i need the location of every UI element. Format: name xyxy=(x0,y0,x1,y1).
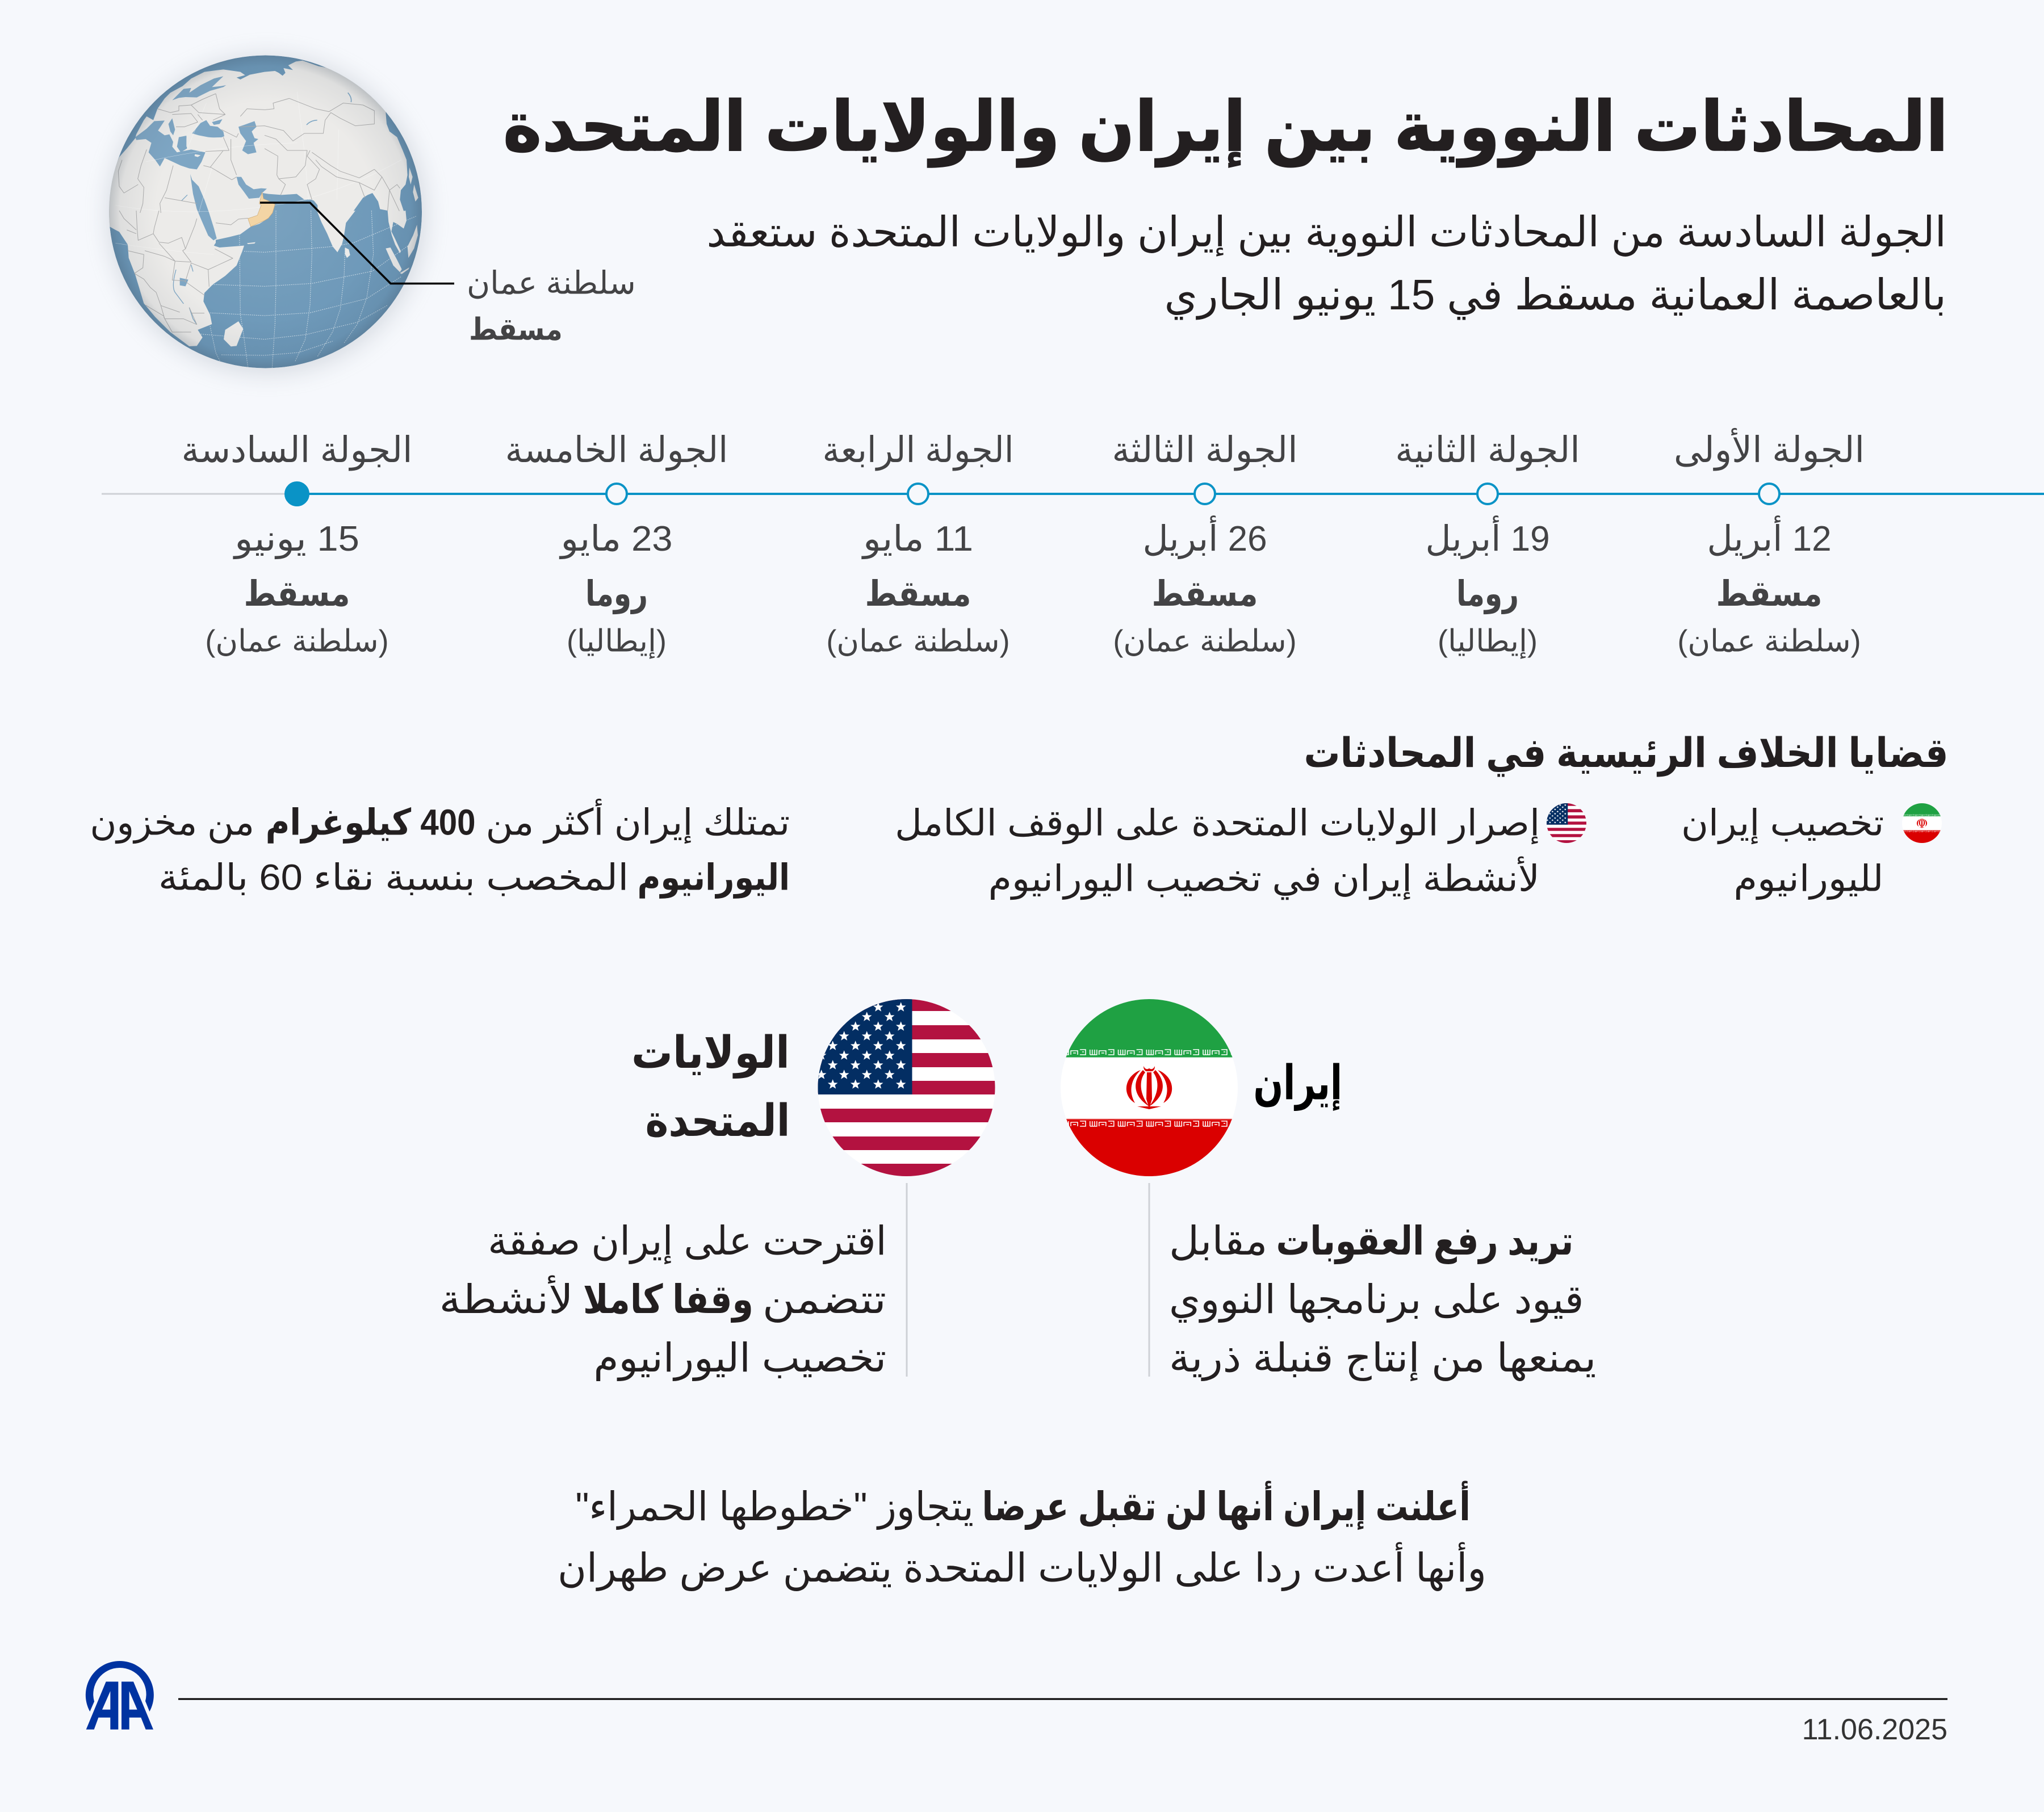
issue: uranium stockpile xyxy=(90,798,790,899)
round 4 xyxy=(822,430,1014,658)
round 5 xyxy=(505,430,728,659)
round 4: (سلطنة عمان) xyxy=(826,624,1010,658)
round 5: (إيطاليا) xyxy=(567,624,667,658)
round 3 xyxy=(1112,430,1298,658)
round 6: 15 يونيو xyxy=(234,519,359,559)
round 1: 12 أبريل xyxy=(1707,519,1832,559)
text: Iran position: قيود على برنامجها النووي xyxy=(1169,1277,1584,1322)
divider: Iran position xyxy=(1148,1183,1150,1377)
round 1 xyxy=(1674,428,1865,658)
issue: US position: إصرار الولايات المتحدة على الوقف الكامل xyxy=(895,803,1540,844)
round 6: مسقط xyxy=(244,574,350,614)
issue: US position: لأنشطة إيران في تخصيب اليورانيوم xyxy=(989,858,1540,899)
subtitle xyxy=(706,208,1946,320)
text: US position xyxy=(439,1219,886,1381)
round 4: مسقط xyxy=(865,574,971,614)
closing statement: يتجاوز "خطوطها الحمراء" xyxy=(576,1484,974,1529)
issue: uranium stockpile: 400 كيلوغرام xyxy=(266,802,476,843)
round 5: روما xyxy=(585,574,648,614)
icon: small US flag xyxy=(1546,803,1586,843)
section heading: قضايا الخلاف الرئيسية في المحادثات xyxy=(1304,731,1949,776)
timeline axis xyxy=(102,493,2044,495)
round 2 xyxy=(1395,430,1580,659)
round 3: (سلطنة عمان) xyxy=(1113,624,1297,658)
round 3: الجولة الثالثة xyxy=(1112,430,1298,470)
globe map xyxy=(104,56,425,372)
label: United States xyxy=(631,1027,790,1146)
round 1: مسقط xyxy=(1716,574,1823,614)
footer rule xyxy=(178,1698,1947,1700)
map label: Oman: مسقط xyxy=(469,313,563,347)
text: US position: تتضمن xyxy=(763,1277,886,1322)
text: US position: لأنشطة xyxy=(439,1277,573,1322)
map label: Oman: سلطنة عمان xyxy=(467,265,636,300)
subtitle: بالعاصمة العمانية مسقط في 15 يونيو الجاري xyxy=(1165,271,1946,318)
issue: Iran position: لليورانيوم xyxy=(1734,858,1884,899)
closing statement: وأنها أعدت ردا على الولايات المتحدة يتضمن عرض طهران xyxy=(558,1546,1486,1590)
subtitle: الجولة السادسة من المحادثات النووية بين إيران والولايات المتحدة ستعقد xyxy=(706,208,1946,255)
flag: United States xyxy=(816,999,995,1177)
logo: Anadolu Agency xyxy=(86,1661,154,1730)
leader line to Oman xyxy=(260,203,454,284)
icon: small Iran flag xyxy=(1902,803,1942,843)
timeline labels xyxy=(181,428,1865,659)
round 3: 26 أبريل xyxy=(1142,519,1267,559)
title: المحادثات النووية بين إيران والولايات المتحدة xyxy=(503,88,1949,165)
round 2: 19 أبريل xyxy=(1425,519,1550,559)
label: United States: المتحدة xyxy=(645,1096,790,1146)
divider: US position xyxy=(906,1183,907,1377)
closing statement xyxy=(558,1480,1486,1592)
text: US position: اقترحت على إيران صفقة xyxy=(488,1219,886,1263)
round 6 xyxy=(181,430,413,658)
issue: Iran position: تخصيب إيران xyxy=(1681,803,1884,844)
round 6: الجولة السادسة xyxy=(181,430,413,470)
round 2: (إيطاليا) xyxy=(1438,624,1538,658)
round 4: 11 مايو xyxy=(863,519,973,559)
label: United States: الولايات xyxy=(631,1027,790,1077)
round 3: مسقط xyxy=(1151,574,1258,614)
label: Iran: إيران xyxy=(1253,1056,1342,1110)
issue: uranium stockpile: من مخزون xyxy=(90,802,254,843)
round 5: الجولة الخامسة xyxy=(505,430,728,470)
timeline markers xyxy=(286,483,1779,505)
text: Iran position: مقابل xyxy=(1169,1219,1267,1263)
round 5: 23 مايو xyxy=(561,519,672,559)
date: 11.06.2025 xyxy=(1802,1713,1947,1746)
issue: uranium stockpile: اليورانيوم xyxy=(637,857,790,898)
text: Iran position: تريد رفع العقوبات xyxy=(1276,1219,1573,1263)
issue: uranium stockpile: المخصب بنسبة نقاء 60 بالمئة xyxy=(158,857,629,898)
map label: Oman xyxy=(467,265,636,347)
round 6: (سلطنة عمان) xyxy=(205,624,389,658)
round 1: (سلطنة عمان) xyxy=(1677,624,1861,658)
round 4: الجولة الرابعة xyxy=(822,430,1014,470)
text: US position: تخصيب اليورانيوم xyxy=(593,1336,886,1380)
issue: US position xyxy=(895,803,1540,900)
text: Iran position xyxy=(1169,1219,1596,1382)
round 1: الجولة الأولى xyxy=(1674,430,1865,470)
text: US position: وقفا كاملا xyxy=(583,1277,753,1322)
issue: Iran position xyxy=(1681,803,1884,900)
flag: Iran xyxy=(1061,999,1238,1176)
closing statement: أعلنت إيران أنها لن تقبل عرضا xyxy=(982,1484,1471,1529)
issue: uranium stockpile: تمتلك إيران أكثر من xyxy=(485,802,790,843)
round 2: الجولة الثانية xyxy=(1395,430,1580,470)
text: Iran position: يمنعها من إنتاج قنبلة ذرية xyxy=(1169,1336,1596,1380)
round 2: روما xyxy=(1456,574,1519,614)
